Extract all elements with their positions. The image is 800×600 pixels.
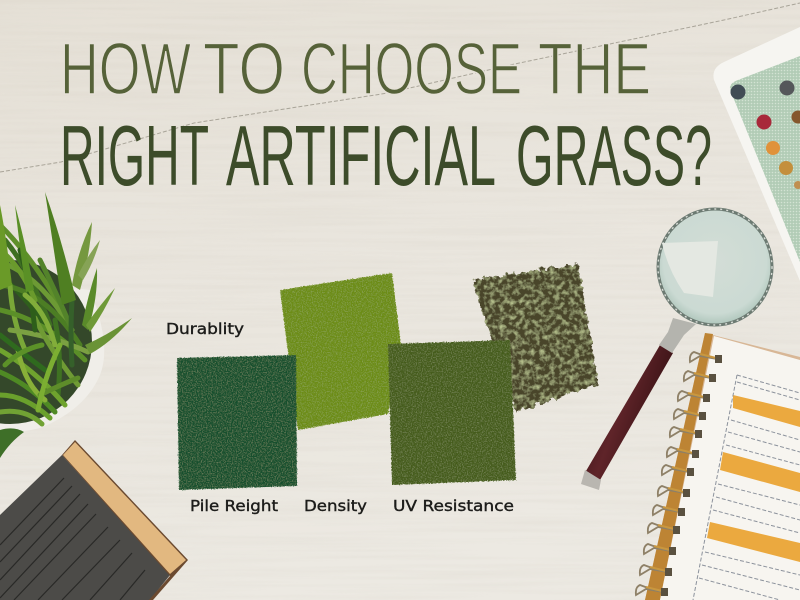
title line 1: CHOOSE <box>301 29 522 110</box>
blade tips <box>0 192 132 458</box>
orange bars <box>707 395 800 562</box>
slatted board sample <box>0 440 188 600</box>
title line 1: HOW <box>60 29 191 110</box>
spiral binding <box>636 352 722 596</box>
page <box>660 336 800 600</box>
board ridges <box>0 478 145 600</box>
spiral notebook <box>636 333 800 600</box>
dashed rows <box>693 375 800 600</box>
board body <box>0 455 170 600</box>
title line 2: ARTIFICIAL <box>226 109 496 204</box>
title line 1: THE <box>538 29 651 110</box>
title line 2: RIGHT <box>60 109 209 204</box>
grass swatches <box>177 264 598 490</box>
ferrule <box>659 318 696 353</box>
title line 1 <box>60 29 651 110</box>
handle <box>586 345 673 480</box>
title line 1: TO <box>203 29 285 110</box>
potted plant <box>0 192 132 458</box>
wooden edge <box>62 440 188 600</box>
label: Durablity: Durablity <box>166 320 244 338</box>
spine <box>645 333 713 600</box>
swatch: dark green <box>177 355 297 490</box>
tablet dots <box>730 80 800 189</box>
swatch: brown natural turf <box>472 264 598 412</box>
pot <box>0 280 104 432</box>
magnifying glass <box>581 209 772 490</box>
thin blades <box>0 225 88 424</box>
lens <box>658 209 772 325</box>
notebook cover <box>645 333 800 600</box>
title <box>60 29 712 204</box>
swatch: olive green <box>388 340 516 485</box>
end cap <box>581 470 601 490</box>
tablet <box>713 27 800 281</box>
swatch: lime green <box>280 273 401 430</box>
label: UV Resistance: UV Resistance <box>393 497 514 515</box>
label: Pile Reight: Pile Reight <box>190 497 278 515</box>
label: Density: Density <box>304 497 367 515</box>
